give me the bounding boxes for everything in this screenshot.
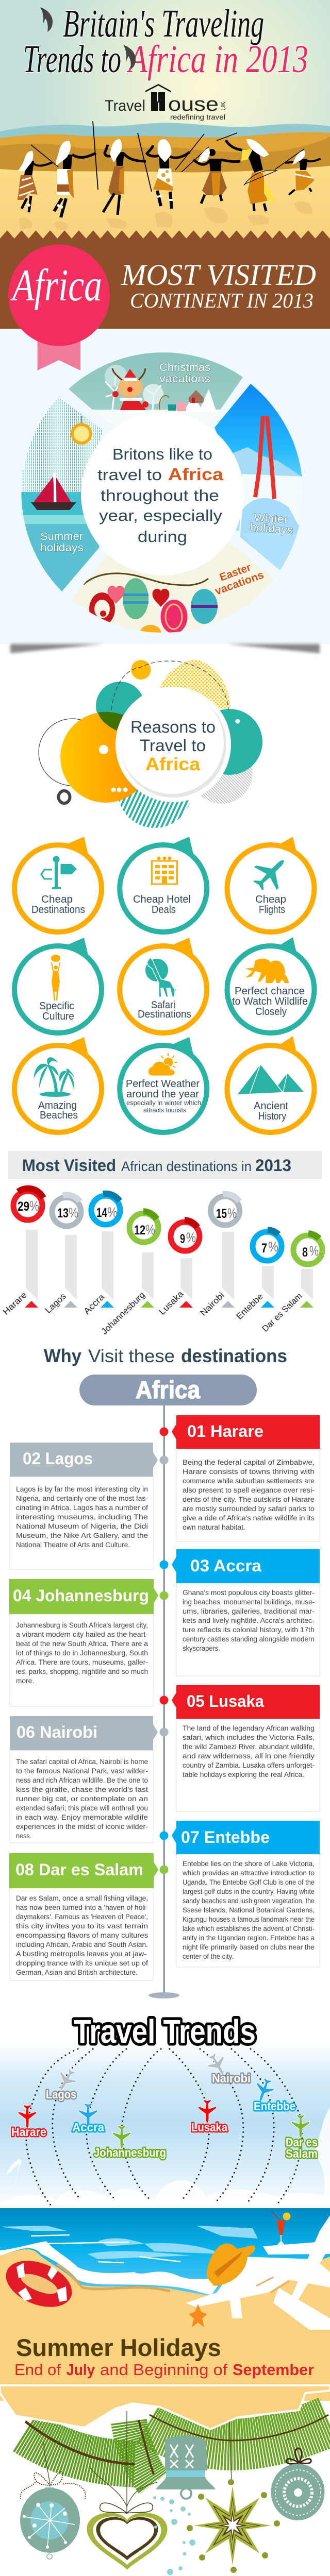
card: 08 Dar es Salam: has now been turned into a 'haven of holi- bbox=[16, 1904, 148, 1911]
sparkles bbox=[153, 2496, 195, 2576]
emblem: reasons to travel to Africa: Reasons to bbox=[130, 718, 216, 736]
pin: Nairobi 15% bbox=[199, 1194, 239, 1318]
segment: christmas vacations: vacations bbox=[159, 373, 210, 385]
header: savanna scene bbox=[0, 0, 330, 242]
pin: Accra 14%: 14 bbox=[96, 1206, 107, 1220]
card: 03 Accra: ing beaches, monumental buildings, muse- bbox=[183, 1598, 315, 1606]
pin: Dar es Salam 8% bbox=[260, 1233, 322, 1334]
pin: Dar es Salam 8%: % bbox=[309, 1243, 319, 1259]
card: 03 Accra: kets and lively nightlife. Accra's architec- bbox=[183, 1617, 315, 1624]
icon: giraffe bbox=[145, 957, 177, 997]
timeline: Africa bbox=[136, 1377, 200, 1404]
ornament: heart bbox=[87, 2411, 167, 2570]
card: 06 Nairobi: ness and rich African wildlife. Be the one to bbox=[16, 1776, 148, 1784]
route dots bbox=[26, 2049, 302, 2205]
reason: amazing beaches bbox=[14, 1037, 102, 1132]
card: 07 Entebbe: lake which establishes the advent of Christi- bbox=[183, 1925, 315, 1933]
pin: Lusaka 9%: % bbox=[186, 1230, 196, 1245]
pin: Lagos 13%: % bbox=[69, 1205, 78, 1221]
dancer 3 bbox=[103, 133, 152, 215]
pin: Lusaka 9%: Lusaka bbox=[157, 1289, 186, 1317]
pin: Lagos 13%: 13 bbox=[57, 1206, 69, 1221]
card: 01 Harare: own natural habitat. bbox=[183, 1523, 245, 1531]
centre circle text: travel to bbox=[97, 466, 162, 484]
card: 08 Dar es Salam: dropping trance with its unique set up of bbox=[16, 1959, 148, 1967]
ornament: star bbox=[187, 2421, 280, 2573]
text: summer holidays: July bbox=[66, 2361, 95, 2379]
logo: Travel House UK: UK bbox=[219, 101, 227, 111]
panel: seasons wheel bbox=[21, 350, 309, 639]
icon: signpost bbox=[41, 856, 77, 889]
heading: why visit these destinations bbox=[44, 1345, 287, 1366]
pin: Harare 29%: 29 bbox=[18, 1199, 29, 1214]
banner: most visited continent: CONTINENT IN 2013 bbox=[130, 289, 314, 312]
segment: christmas vacations bbox=[69, 352, 243, 427]
card: 05 Lusaka: and raw wilderness, all in one friendly bbox=[183, 1752, 315, 1760]
route: Entebbe: Entebbe bbox=[254, 2099, 295, 2113]
panel shadow bbox=[10, 644, 320, 653]
card: 03 Accra: century castles standing alongside modern bbox=[183, 1635, 315, 1643]
route: Harare: Harare bbox=[11, 2125, 46, 2139]
card: 06 Nairobi bbox=[10, 1716, 168, 1843]
dancer 5 bbox=[182, 147, 240, 204]
card: 05 Lusaka bbox=[160, 1685, 320, 1811]
card: 07 Entebbe: anity in the Ugandan region. Entebbe has a bbox=[183, 1934, 315, 1942]
centre circle text: throughout the bbox=[101, 486, 219, 504]
logo: Travel House UK: redefining travel bbox=[170, 113, 225, 121]
card: 08 Dar es Salam: A bustling metropolis leaves you at jaw- bbox=[16, 1950, 146, 1958]
reason: cheap flights: Flights bbox=[259, 904, 285, 916]
card: 07 Entebbe: largest golf clubs in the country. Having white bbox=[183, 1888, 315, 1895]
card: 01 Harare: Harare consists of towns thriving with bbox=[183, 1468, 315, 1476]
route: Dar es Salam: Salam bbox=[286, 2147, 318, 2160]
pin: Lusaka 9% bbox=[157, 1220, 200, 1317]
card: 03 Accra bbox=[160, 1549, 320, 1676]
route: Johannesburg bbox=[94, 2126, 166, 2159]
reason: perfect weather bbox=[120, 1037, 207, 1132]
text: summer holidays: End of bbox=[14, 2361, 61, 2379]
pin: Nairobi 15%: % bbox=[227, 1206, 237, 1221]
timeline bbox=[79, 1375, 257, 1998]
card: 03 Accra: skyscrapers. bbox=[183, 1645, 220, 1652]
emblem: reasons to travel to Africa: Travel to bbox=[140, 736, 206, 755]
card: 02 Lagos: cinating in Africa. Lagos has a number of bbox=[16, 1504, 148, 1512]
card: 07 Entebbe: which provides an attractive introduction to bbox=[182, 1869, 315, 1877]
reason: perfect weather: Perfect Weather bbox=[126, 1078, 200, 1090]
heading: travel trends: Travel Trends bbox=[74, 2013, 256, 2050]
card: 08 Dar es Salam: 08 Dar es Salam bbox=[15, 1860, 143, 1879]
icon: airplane bbox=[246, 849, 295, 897]
pin: Johannesburg 12%: 12 bbox=[134, 1223, 145, 1238]
icon: cloud and sun bbox=[148, 1053, 177, 1076]
pin: Dar es Salam 8%: 8 bbox=[302, 1245, 308, 1260]
card: 04 Johannesburg: ies, parks, shopping, nightlife and so much bbox=[16, 1668, 148, 1675]
card: 02 Lagos: 02 Lagos bbox=[23, 1449, 93, 1468]
reason: cheap destinations bbox=[14, 837, 102, 932]
route: Accra bbox=[72, 2104, 104, 2134]
card: 06 Nairobi: in each way. Enjoy memorable wildlife bbox=[16, 1814, 148, 1821]
reason: cheap destinations: Cheap bbox=[41, 894, 73, 905]
card: 04 Johannesburg: Johannesburg is South Africa's largest city, bbox=[16, 1621, 148, 1629]
card: 05 Lusaka: safari, which includes the Victoria Falls, bbox=[183, 1734, 315, 1741]
card: 04 Johannesburg: lot of things to do in Johannesburg, South bbox=[16, 1649, 148, 1657]
heading: most visited African destinations: Most Visited bbox=[22, 1156, 116, 1175]
reason: ancient history: Ancient bbox=[254, 1100, 288, 1112]
reason: safari destinations: Destinations bbox=[138, 1009, 191, 1020]
pin: Johannesburg 12%: Johannesburg bbox=[100, 1290, 147, 1336]
pin: Accra 14% bbox=[82, 1194, 120, 1316]
segment: summer holidays bbox=[21, 397, 108, 594]
segment: easter vacations: Easter bbox=[218, 562, 253, 584]
centre circle text bbox=[81, 413, 244, 575]
card: 06 Nairobi: The safari capital of Africa, Nairobi is home bbox=[16, 1758, 148, 1766]
branch stems bbox=[25, 2415, 328, 2475]
cocktail bbox=[272, 2212, 291, 2245]
card: 01 Harare: give a ride of Africa's native wildlife in its bbox=[183, 1514, 315, 1522]
reason: amazing beaches: Beaches bbox=[40, 1110, 78, 1121]
dancer 1 bbox=[18, 145, 58, 212]
pin: Entebbe 7%: 7 bbox=[261, 1241, 267, 1256]
reason: watch wildlife: Perfect chance bbox=[235, 986, 305, 997]
card: 01 Harare: Being the federal capital of Zimbabwe, bbox=[183, 1459, 315, 1466]
ornament: lace ball bbox=[271, 2448, 325, 2520]
reason: specific culture bbox=[14, 938, 102, 1033]
reason: specific culture: Culture bbox=[42, 1011, 74, 1022]
card: 05 Lusaka: country of Zambia. Lusaka offers unforget- bbox=[183, 1761, 315, 1769]
reason: watch wildlife bbox=[227, 937, 315, 1033]
card: 03 Accra: Ghana's most populous city boasts glitter- bbox=[183, 1589, 315, 1597]
route: Entebbe bbox=[252, 2077, 295, 2113]
pin: Johannesburg 12% bbox=[100, 1211, 158, 1336]
card: 06 Nairobi: experiences in the midst of iconic wilder- bbox=[16, 1823, 148, 1831]
segment: winter holidays bbox=[214, 384, 303, 570]
reason: perfect weather: especially in winter which bbox=[126, 1099, 201, 1107]
card: 02 Lagos: National Museum of Nigeria, the Didi bbox=[16, 1522, 148, 1530]
reason: cheap hotel deals bbox=[120, 837, 207, 932]
ribbon badge: Africa bbox=[8, 244, 110, 370]
card: 01 Harare bbox=[160, 1415, 320, 1541]
dancer 2 bbox=[54, 121, 98, 217]
card: 07 Entebbe: Entebbe lies on the shore of Lake Victoria, bbox=[183, 1860, 315, 1868]
banner: most visited continent: MOST VISITED bbox=[121, 258, 316, 292]
dancer 6 bbox=[217, 133, 277, 211]
heading: why visit these destinations: Visit these bbox=[88, 1346, 175, 1366]
dancer 4 bbox=[147, 134, 204, 209]
card: 01 Harare: commerce while suburban settlements are bbox=[183, 1477, 315, 1485]
card: 05 Lusaka: The land of the legendary African walking bbox=[183, 1724, 315, 1732]
pin: Lagos 13% bbox=[43, 1195, 81, 1315]
reason: perfect weather: attracts tourists bbox=[143, 1106, 186, 1114]
reason: ancient history: History bbox=[258, 1111, 286, 1122]
pin: Entebbe 7%: % bbox=[268, 1239, 278, 1255]
pin: Harare 29% bbox=[1, 1189, 43, 1317]
text: summer holidays bbox=[14, 2334, 314, 2379]
card: 07 Entebbe: Ssese Islands, National Botanical Gardens, bbox=[183, 1906, 315, 1914]
reason: cheap destinations: Destinations bbox=[31, 904, 85, 916]
torn sand edge bbox=[0, 2385, 330, 2429]
route: Harare bbox=[11, 2105, 46, 2139]
heading: most visited African destinations: 2013 bbox=[255, 1156, 291, 1175]
map: travel trends sky with routes bbox=[0, 2043, 330, 2208]
reason: safari destinations bbox=[120, 938, 207, 1033]
pin: Nairobi 15%: Nairobi bbox=[199, 1291, 226, 1318]
card: 02 Lagos: interesting museums, including The bbox=[16, 1513, 148, 1521]
card: 03 Accra: 03 Accra bbox=[190, 1556, 261, 1575]
text: summer holidays: September bbox=[233, 2361, 314, 2379]
card: 08 Dar es Salam: daymakers'. Famous as 'Heaven of Peace', bbox=[16, 1913, 148, 1921]
deck chair bbox=[186, 2215, 330, 2330]
pin: Harare 29%: % bbox=[29, 1198, 39, 1214]
card: 06 Nairobi: ness. bbox=[16, 1832, 31, 1840]
title: Trends to bbox=[23, 38, 121, 81]
segment: winter holidays: holidays bbox=[250, 521, 293, 536]
card: 08 Dar es Salam: Dar es Salam, once a small fishing village, bbox=[16, 1894, 148, 1902]
card: 06 Nairobi: runner big cat, or contemplate on an bbox=[16, 1795, 148, 1803]
reason: perfect weather: around the year bbox=[126, 1089, 199, 1100]
pin: Johannesburg 12%: % bbox=[145, 1222, 155, 1238]
text: summer holidays: and Beginning of bbox=[100, 2361, 227, 2379]
logo: Travel House UK: ouse bbox=[168, 94, 219, 115]
route: Accra: Accra bbox=[72, 2121, 104, 2134]
centre circle text: Britons like to bbox=[112, 445, 212, 463]
logo: Travel House UK: Travel bbox=[105, 97, 145, 114]
pin: Nairobi 15%: 15 bbox=[216, 1207, 227, 1221]
ribbon badge: Africa: Africa bbox=[10, 261, 102, 311]
card: 02 Lagos bbox=[10, 1443, 168, 1569]
logo: Travel House UK bbox=[105, 84, 227, 121]
card: 02 Lagos: Nigeria, and certainly one of the most fas- bbox=[16, 1495, 148, 1502]
card: 07 Entebbe bbox=[160, 1821, 320, 1967]
pin: Entebbe 7% bbox=[235, 1230, 282, 1321]
card: 01 Harare: are mostly surrounded by safari parks to bbox=[183, 1505, 315, 1513]
sun hat bbox=[207, 2244, 255, 2286]
card: 06 Nairobi: extended safari; this place will enthrall you bbox=[16, 1804, 148, 1812]
card: 02 Lagos: Lagos is by far the most interesting city in bbox=[16, 1485, 148, 1493]
segment: christmas vacations: Christmas bbox=[159, 362, 210, 374]
icon: birds bbox=[40, 7, 136, 70]
reason: watch wildlife: Closely bbox=[255, 1006, 287, 1018]
card: 03 Accra: ture reflects its colonial history, with 17th bbox=[183, 1626, 315, 1634]
route: Dar es Salam bbox=[286, 2115, 318, 2160]
card: 08 Dar es Salam bbox=[9, 1853, 168, 1980]
card: 07 Entebbe: Kigungu houses a famous landmark near the bbox=[183, 1916, 315, 1923]
card: 07 Entebbe: center of the city. bbox=[183, 1953, 234, 1960]
icon: palm trees bbox=[34, 1057, 75, 1097]
centre circle text: year, especially bbox=[99, 506, 223, 524]
lifebuoy bbox=[0, 2252, 79, 2316]
route: Johannesburg: Johannesburg bbox=[94, 2146, 166, 2159]
dancer 7 bbox=[275, 149, 321, 195]
illustration: christmas pine branches bbox=[25, 2421, 328, 2483]
route: Nairobi: Nairobi bbox=[212, 2072, 251, 2085]
route: Dar es Salam: Dar es bbox=[286, 2136, 318, 2149]
segment: summer holidays: holidays bbox=[40, 542, 84, 554]
centre circle text: Africa bbox=[168, 465, 224, 484]
card: 04 Johannesburg: Africa. There are tours, museums, galler- bbox=[16, 1658, 148, 1666]
banner: most visited continent bbox=[0, 230, 330, 644]
card: 06 Nairobi: kiss the giraffe, chase the world's fast bbox=[16, 1786, 148, 1793]
card: 03 Accra: ums, libraries, galleries, traditional mar- bbox=[183, 1607, 315, 1615]
reason: cheap hotel deals: Cheap Hotel bbox=[133, 894, 191, 905]
card: 04 Johannesburg: 04 Johannesburg bbox=[13, 1586, 149, 1605]
emblem: reasons to travel to Africa bbox=[39, 659, 262, 828]
segment: easter vacations bbox=[72, 542, 274, 633]
bell ornament bbox=[156, 2436, 216, 2499]
card: 04 Johannesburg: beat of the new South Africa. There are a bbox=[16, 1640, 148, 1648]
pin: Entebbe 7%: Entebbe bbox=[235, 1292, 265, 1321]
card: 07 Entebbe: Uganda. The Entebbe Golf Club is one of the bbox=[183, 1878, 315, 1886]
route: Lusaka: Lusaka bbox=[191, 2121, 227, 2134]
card: 02 Lagos: National Theatre of Arts and Culture. bbox=[16, 1541, 130, 1549]
card: 05 Lusaka: the wild Zambezi River, abundant wildlife, bbox=[183, 1743, 315, 1751]
title bbox=[23, 2, 308, 81]
heading: why visit these destinations: destinations bbox=[181, 1345, 287, 1366]
chart: destination pins bbox=[1, 1189, 322, 1336]
reason: ancient history bbox=[227, 1036, 315, 1132]
dancers bbox=[18, 121, 321, 217]
pin: Lagos 13%: Lagos bbox=[43, 1291, 68, 1315]
pin: Accra 14%: Accra bbox=[82, 1292, 107, 1316]
segment: winter holidays: Winter bbox=[254, 512, 288, 526]
reason: safari destinations: Safari bbox=[151, 999, 175, 1011]
heading: most visited African destinations: African destinations in bbox=[121, 1159, 252, 1174]
card: 08 Dar es Salam: German, Asian and British architecture. bbox=[16, 1969, 138, 1976]
route: Lusaka bbox=[191, 2100, 227, 2134]
card: 04 Johannesburg: more. bbox=[16, 1677, 34, 1685]
card: 01 Harare: dents of the city. The outskirts of Harare bbox=[183, 1496, 315, 1503]
card: 07 Entebbe: sandy beaches and lush green vegetation, the bbox=[183, 1897, 315, 1905]
ornament: teal ball bbox=[20, 2442, 86, 2559]
reason: cheap flights bbox=[227, 837, 315, 932]
reason: cheap hotel deals: Deals bbox=[152, 904, 176, 916]
emblem: reasons to travel to Africa: Africa bbox=[145, 754, 201, 774]
card: 04 Johannesburg: a vibrant modern city hailed as the heart- bbox=[16, 1631, 148, 1638]
route: Lagos bbox=[46, 2066, 79, 2101]
card: 02 Lagos: Museum, the Nike Art Gallery, and the bbox=[16, 1532, 148, 1539]
card: 01 Harare: also present to spell elegance over resi- bbox=[183, 1486, 315, 1494]
reason: amazing beaches: Amazing bbox=[38, 1100, 77, 1111]
starfish bbox=[189, 2304, 207, 2327]
illustration: beach bbox=[0, 2208, 330, 2401]
icon: elephants bbox=[245, 959, 289, 983]
card: 08 Dar es Salam: this city invites you to its vast terrain bbox=[16, 1922, 148, 1930]
reason: cheap flights: Cheap bbox=[255, 894, 286, 905]
icon: hotel bbox=[152, 856, 177, 885]
card: 08 Dar es Salam: encompassing flavors of many cultures bbox=[16, 1931, 148, 1939]
icon: woman with pot bbox=[51, 955, 60, 1001]
card: 01 Harare: 01 Harare bbox=[187, 1422, 263, 1440]
icon: pyramids bbox=[238, 1064, 304, 1094]
card: 05 Lusaka: 05 Lusaka bbox=[187, 1692, 264, 1710]
pin: Dar es Salam 8%: Dar es Salam bbox=[260, 1291, 304, 1334]
route: Nairobi bbox=[204, 2050, 251, 2085]
card: 08 Dar es Salam: including African, Arabic and South Asian. bbox=[16, 1941, 148, 1948]
pin: Accra 14%: % bbox=[107, 1205, 118, 1220]
centre circle text: during bbox=[138, 528, 187, 546]
card: 07 Entebbe: night life primarily based on clubs near the bbox=[183, 1943, 315, 1951]
reason: watch wildlife: to Watch Wildlife bbox=[232, 996, 308, 1007]
card: 04 Johannesburg bbox=[9, 1579, 168, 1706]
heading: most visited African destinations bbox=[8, 1151, 322, 1179]
route: Lagos: Lagos bbox=[46, 2088, 76, 2101]
heading: why visit these destinations: Why bbox=[44, 1345, 81, 1366]
text: summer holidays: Summer Holidays bbox=[16, 2334, 221, 2361]
card: 06 Nairobi: to the famous National Park, vast wilder- bbox=[16, 1767, 148, 1775]
card: 07 Entebbe: 07 Entebbe bbox=[181, 1828, 270, 1846]
segment: easter vacations: vacations bbox=[213, 569, 266, 598]
card: 05 Lusaka: table holidays exploring the real Africa. bbox=[183, 1771, 304, 1778]
card: 06 Nairobi: 06 Nairobi bbox=[16, 1723, 97, 1741]
pin: Harare 29%: Harare bbox=[1, 1290, 29, 1317]
reason: specific culture: Specific bbox=[39, 1001, 74, 1012]
segment: summer holidays: Summer bbox=[40, 531, 83, 543]
pin: Lusaka 9%: 9 bbox=[180, 1232, 185, 1246]
